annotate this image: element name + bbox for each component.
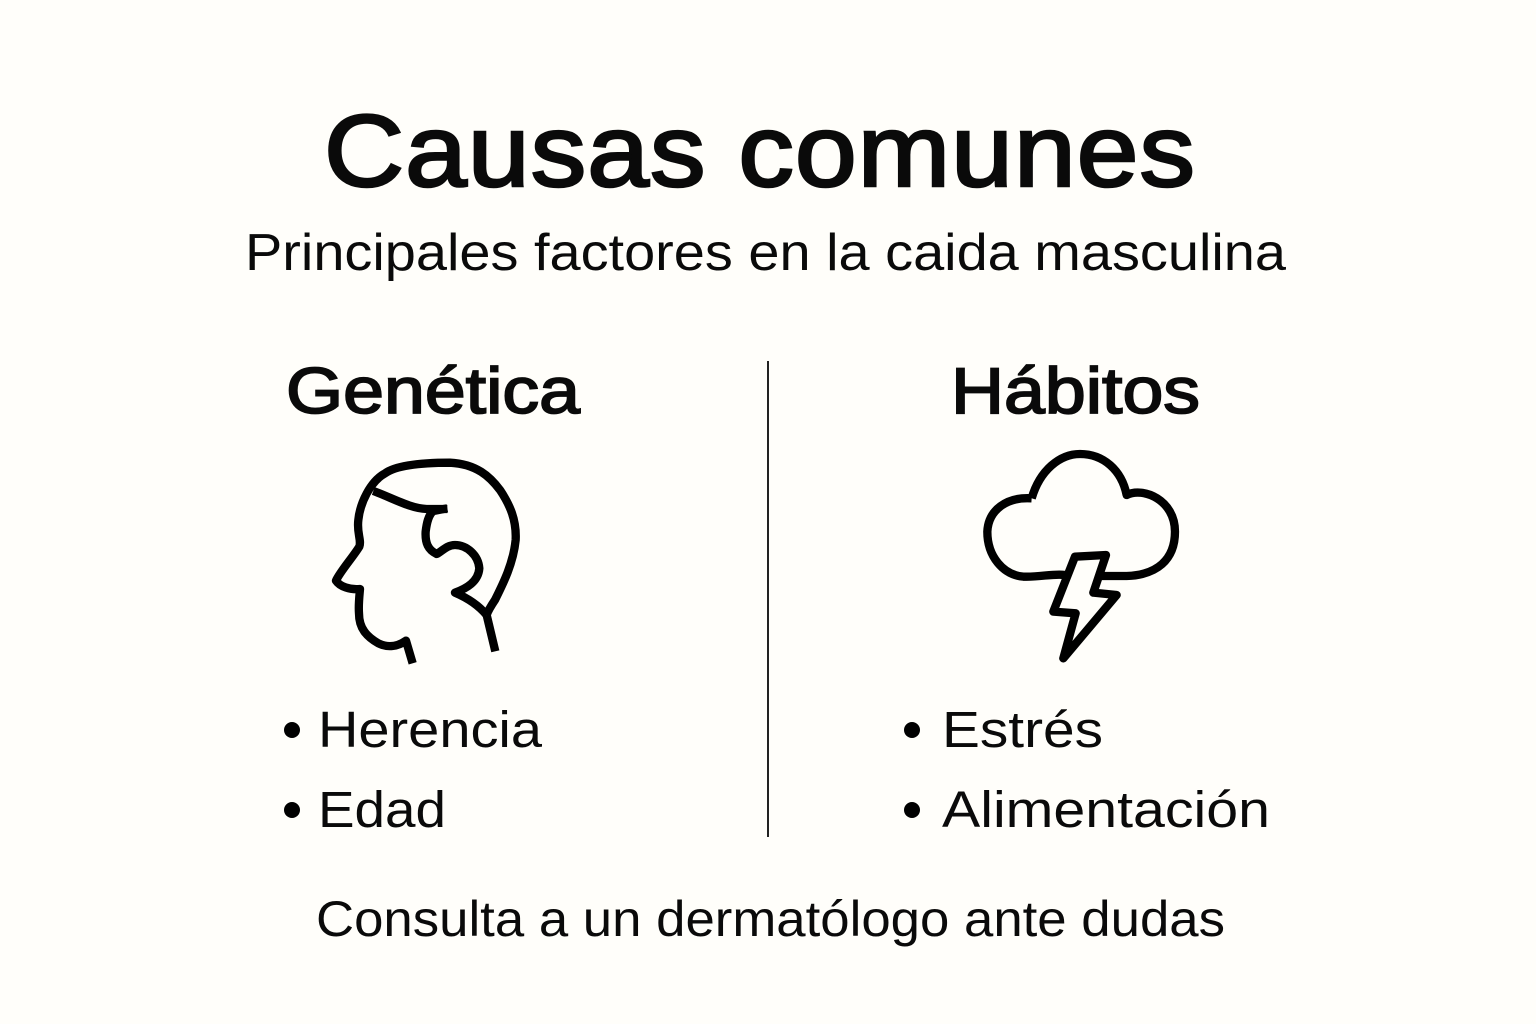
- icon: storm cloud with lightning: [987, 454, 1175, 658]
- divider between columns: [767, 361, 769, 837]
- heading: Hábitos: Hábitos: [951, 354, 1200, 427]
- panel: Hábitos: [904, 354, 1270, 838]
- list: Alimentación: Alimentación: [942, 781, 1270, 838]
- footer note: Consulta a un dermatólogo ante dudas: [316, 891, 1225, 947]
- list: Edad: Edad: [318, 781, 446, 838]
- list: Estrés: Estrés: [942, 701, 1103, 758]
- panel: Genética: [284, 354, 581, 838]
- subtitle: Principales factores en la caida masculina: [245, 224, 1286, 282]
- icon: head profile: [336, 463, 516, 663]
- heading: Genética: Genética: [286, 354, 581, 427]
- list: Herencia: Herencia: [318, 701, 543, 758]
- title: Causas comunes: [324, 94, 1196, 208]
